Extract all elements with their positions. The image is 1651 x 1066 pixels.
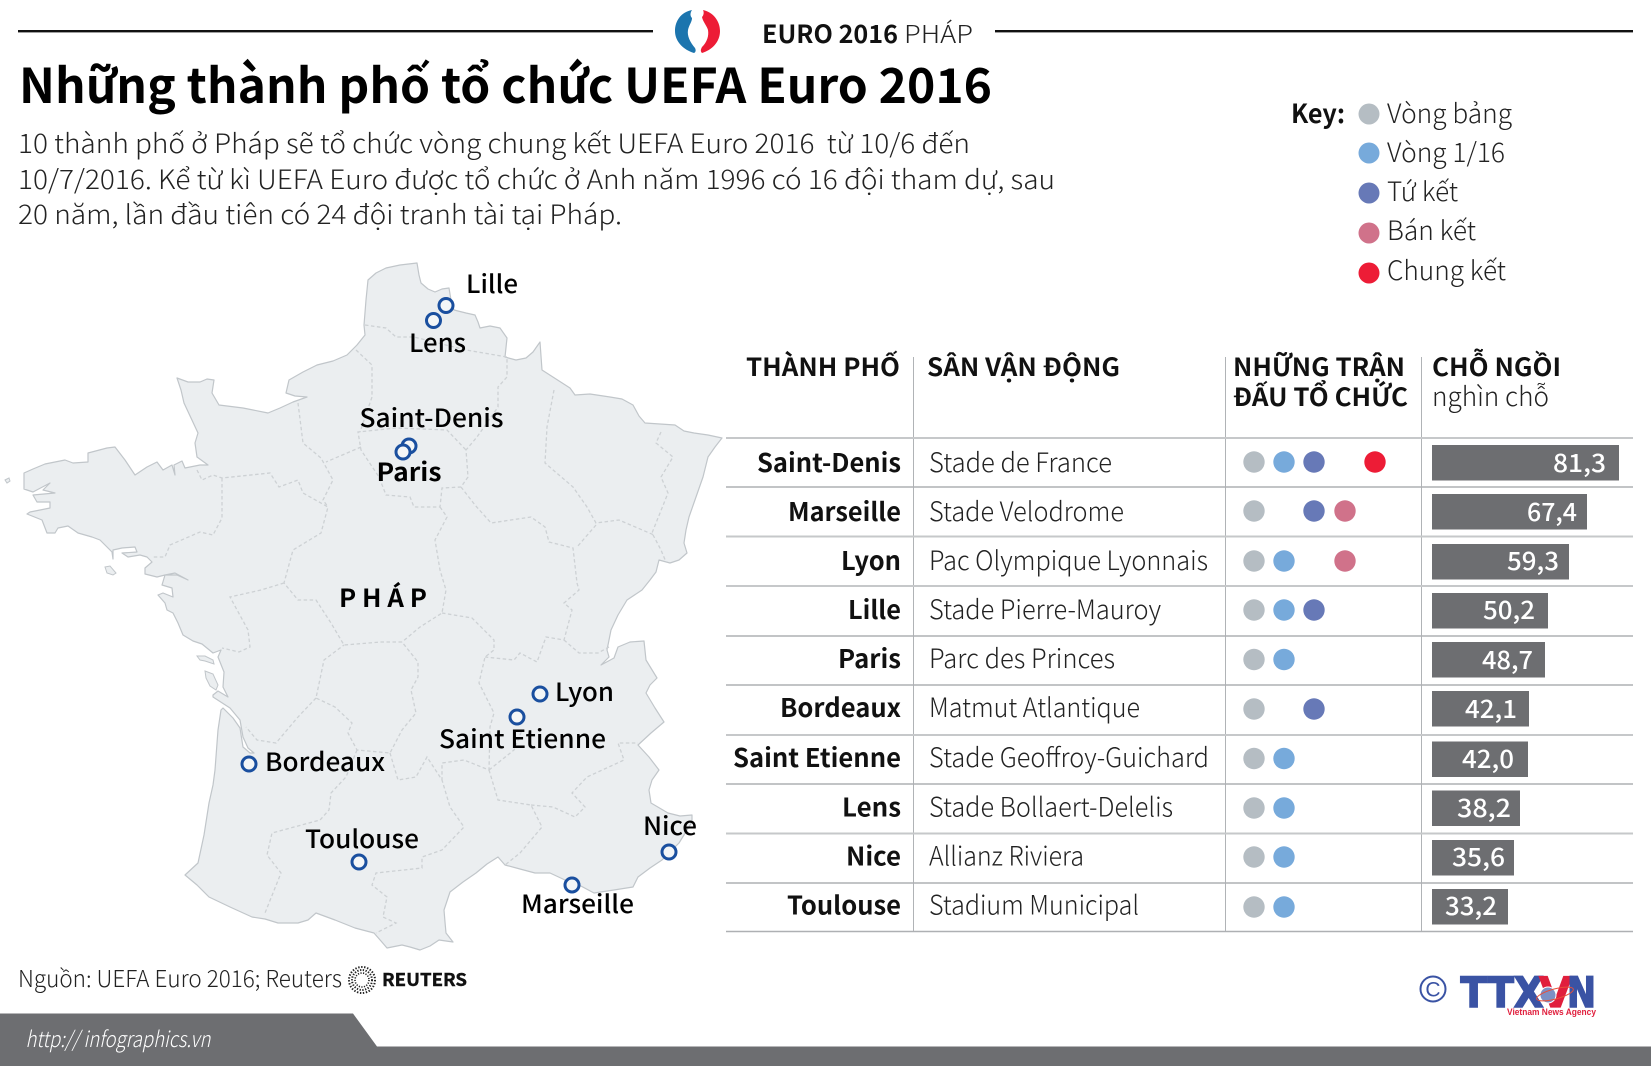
icon: Euro 2016 logo (675, 10, 720, 53)
row: Bordeaux: Matmut Atlantique (929, 686, 1140, 725)
row: Lyon: Pac Olympique Lyonnais (929, 539, 1208, 578)
intro text: 10/7/2016. Kể từ kì UEFA Euro được tổ chức ở Anh năm 1996 có 16 đội tham dự, sau (18, 158, 1055, 197)
row: Lens: Stade Bollaert-Delelis (929, 786, 1173, 824)
legend: key: Vòng 1/16 (1387, 131, 1505, 170)
row: Lyon: Lyon (841, 541, 901, 578)
legend: key: Vòng bảng (1387, 92, 1513, 131)
row: Nice (846, 834, 1514, 876)
intro text: 20 năm, lần đầu tiên có 24 đội tranh tài tại Pháp. (18, 193, 622, 232)
row: Lille: Stade Pierre-Mauroy (929, 588, 1161, 627)
city labels: Saint-Denis (360, 399, 504, 435)
row: Nice: Nice (846, 836, 901, 874)
table header: nghìn chỗ (1432, 375, 1549, 414)
legend: key: Bán kết (1387, 209, 1476, 248)
legend: key: Chung kết (1387, 249, 1506, 288)
row: Toulouse (787, 884, 1508, 924)
logo: TTXVN: V (1539, 968, 1572, 1017)
row: Bordeaux (780, 686, 1529, 726)
map of France (5, 263, 722, 950)
map outline (24, 263, 722, 950)
row: Toulouse: Toulouse (787, 886, 901, 922)
table header: NHỮNG TRẬN (1233, 348, 1405, 384)
row: Saint Etienne (733, 736, 1528, 777)
row: Saint-Denis: Saint-Denis (757, 443, 901, 480)
city labels: Saint Etienne (439, 720, 606, 756)
table header: CHỖ NGỒI (1432, 348, 1561, 384)
legend: key: Key: (1291, 94, 1345, 131)
row: Paris: Paris (838, 639, 901, 676)
footer bar (0, 1014, 1651, 1066)
city labels: Lille (466, 265, 518, 301)
row: Saint-Denis: 81,3 (1553, 444, 1606, 480)
row: Lens (842, 786, 1520, 826)
table header: SÂN VẬN ĐỘNG (927, 348, 1120, 384)
row: Paris: Parc des Princes (929, 637, 1115, 676)
row: Marseille: Stade Velodrome (929, 490, 1124, 529)
source line: Nguồn: UEFA Euro 2016; Reuters (18, 960, 342, 994)
city labels: Bordeaux (265, 743, 385, 779)
row: Lille (848, 588, 1548, 628)
city labels: Nice (643, 807, 697, 843)
row: Saint Etienne: 42,0 (1462, 740, 1514, 776)
row: Saint-Denis (757, 441, 1619, 480)
city labels: Lens (409, 324, 466, 360)
section tag text: EURO 2016 (762, 15, 898, 51)
city labels: P H Á P (339, 579, 427, 615)
row: Marseille: 67,4 (1527, 493, 1577, 529)
intro text: 10 thành phố ở Pháp sẽ tổ chức vòng chung kết UEFA Euro 2016 từ 10/6 đến (18, 122, 970, 161)
logo: TTXVN: TTX (1460, 968, 1544, 1017)
legend: key: Tứ kết (1387, 170, 1458, 209)
logo: TTXVN: N (1567, 968, 1596, 1017)
source line: REUTERS (382, 967, 467, 992)
regional borders (152, 325, 673, 933)
top rule and section tag (18, 10, 1633, 53)
table grid (726, 357, 1633, 932)
city labels: Lyon (555, 673, 614, 709)
city labels: Marseille (521, 885, 634, 921)
logo: TTXVN (1420, 968, 1597, 1018)
stadium table (726, 348, 1633, 932)
row: Paris: 48,7 (1482, 641, 1533, 677)
section tag text: PHÁP (904, 15, 973, 51)
intro text (18, 122, 1055, 232)
row: Lens: 38,2 (1457, 789, 1511, 825)
row: Nice: Allianz Riviera (929, 834, 1084, 874)
city markers (242, 298, 676, 892)
copyright mark: C (1425, 978, 1441, 1002)
row: Lille: Lille (848, 590, 901, 627)
row: Toulouse: Stadium Municipal (929, 884, 1139, 922)
row: Bordeaux: 42,1 (1465, 690, 1517, 726)
legend: key (1291, 92, 1513, 288)
table header: ĐẤU TỔ CHỨC (1233, 378, 1408, 414)
row: Saint Etienne: Saint Etienne (733, 738, 901, 775)
row: Saint-Denis: Stade de France (929, 441, 1112, 480)
icon: Reuters logo (349, 967, 375, 993)
row: Toulouse: 33,2 (1445, 887, 1497, 923)
city labels: Toulouse (305, 820, 419, 856)
logo: TTXVN: Vietnam News Agency (1507, 1007, 1597, 1018)
row: Marseille: Marseille (788, 492, 901, 529)
row: Marseille (788, 490, 1587, 530)
table header: THÀNH PHỐ (746, 348, 900, 384)
title: Những thành phố tổ chức UEFA Euro 2016 (19, 47, 992, 117)
row: Saint Etienne: Stade Geoffroy-Guichard (929, 736, 1209, 775)
section tag text (762, 15, 973, 51)
row: Lens: Lens (842, 788, 901, 824)
city labels (265, 265, 697, 921)
row: Lille: 50,2 (1483, 591, 1535, 627)
row: Paris (838, 637, 1545, 678)
table header (746, 348, 1561, 414)
row: Bordeaux: Bordeaux (780, 688, 901, 725)
footer bar: http:// infographics.vn (26, 1022, 211, 1054)
row: Nice: 35,6 (1452, 838, 1505, 874)
row: Lyon: 59,3 (1507, 542, 1559, 578)
islands (5, 478, 218, 690)
city labels: Paris (376, 453, 442, 489)
row: Lyon (841, 539, 1569, 580)
copyright mark (1420, 976, 1446, 1002)
